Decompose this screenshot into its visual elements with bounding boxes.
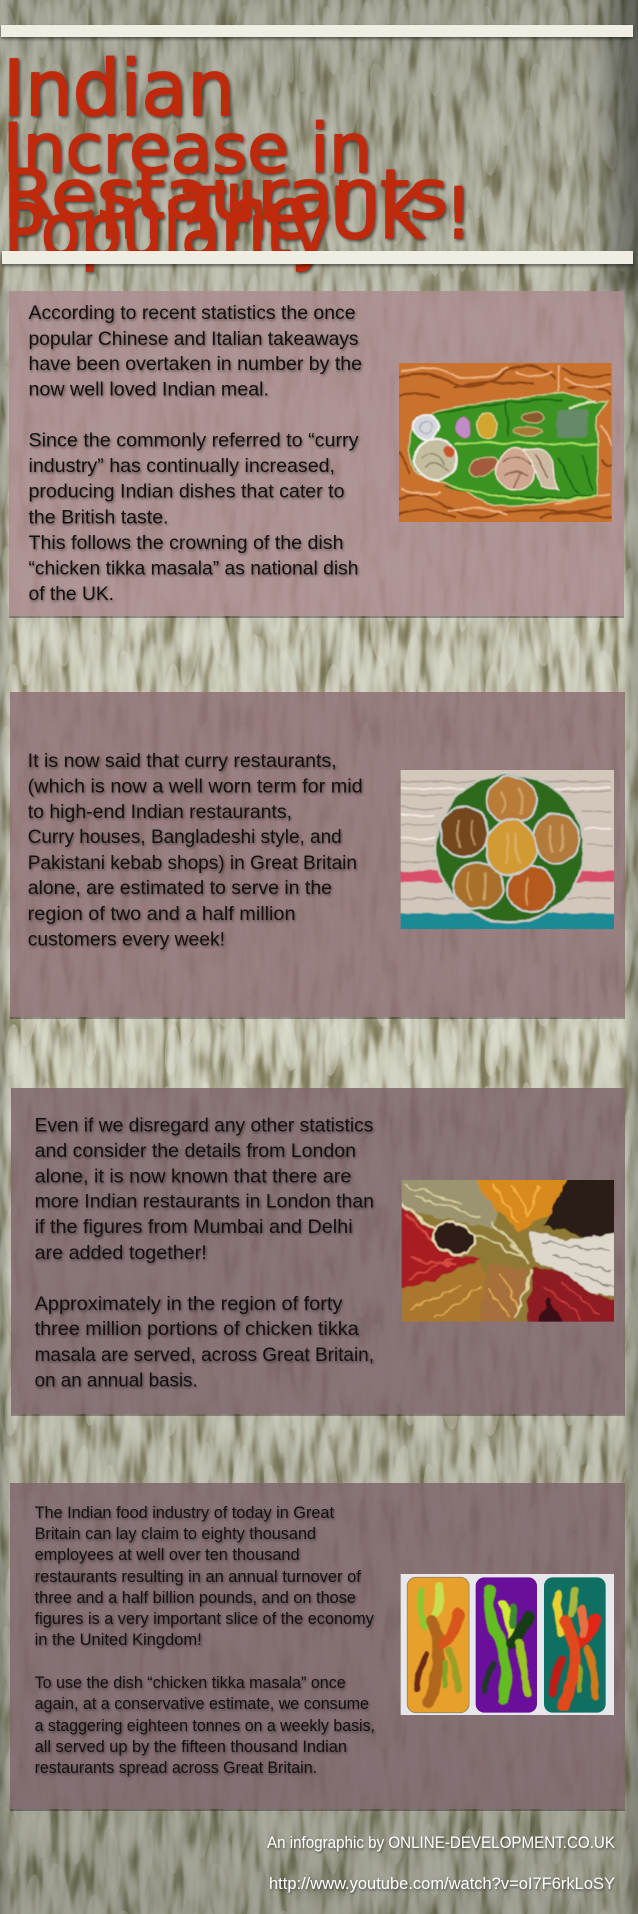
text: recent statistics: “chicken tikka masala” as national dish bbox=[28, 558, 358, 580]
image: three chilli panels bbox=[400, 1574, 614, 1715]
panel: London statistics bbox=[11, 1088, 625, 1416]
text: recent statistics: This follows the crowning of the dish bbox=[28, 532, 344, 554]
text: industry figures: a staggering eighteen tonnes on a weekly basis, bbox=[35, 1717, 375, 1735]
text: London statistics: three million portions of chicken tikka bbox=[35, 1318, 359, 1340]
panel: industry figures bbox=[10, 1483, 625, 1811]
text: London statistics: if the figures from Mumbai and Delhi bbox=[35, 1216, 353, 1238]
text: curry restaurants: region of two and a half million bbox=[28, 903, 295, 925]
text: curry restaurants: Pakistani kebab shops) in Great Britain bbox=[28, 852, 357, 874]
text: recent statistics: popular Chinese and Italian takeaways bbox=[28, 328, 359, 350]
text: industry figures: all served up by the fifteen thousand Indian bbox=[35, 1738, 347, 1756]
text: industry figures: restaurants spread across Great Britain. bbox=[35, 1759, 317, 1777]
text: curry restaurants: customers every week! bbox=[28, 928, 225, 950]
text: London statistics bbox=[35, 1114, 374, 1392]
text: London statistics: are added together! bbox=[35, 1242, 207, 1264]
text: industry figures: employees at well over ten thousand bbox=[35, 1546, 300, 1564]
text: curry restaurants: to high-end Indian restaurants, bbox=[28, 801, 292, 823]
text: industry figures: in the United Kingdom! bbox=[35, 1631, 202, 1649]
title: Indian Restaurants Increase in Popularity in the UK: Popularity bbox=[4, 189, 330, 274]
image: thali on banana leaf bbox=[399, 363, 612, 522]
text: recent statistics: the British taste. bbox=[28, 506, 168, 528]
text: industry figures: Britain can lay claim to eighty thousand bbox=[35, 1525, 316, 1543]
text: recent statistics bbox=[28, 302, 362, 605]
text: curry restaurants: Curry houses, Bangladeshi style, and bbox=[28, 826, 342, 848]
text: London statistics: Approximately in the region of forty bbox=[35, 1293, 343, 1315]
panel: recent statistics bbox=[9, 291, 624, 618]
title: Indian Restaurants Increase in Popularity in the UK: In The UK ! bbox=[100, 173, 472, 255]
text: curry restaurants: It is now said that curry restaurants, bbox=[28, 750, 337, 772]
text: recent statistics: producing Indian dishes that cater to bbox=[28, 480, 345, 502]
text: London statistics: more Indian restaurants in London than bbox=[35, 1190, 374, 1212]
text: London statistics: on an annual basis. bbox=[35, 1370, 198, 1392]
text: industry figures: To use the dish “chicken tikka masala” once bbox=[35, 1674, 346, 1692]
text: industry figures: The Indian food industry of today in Great bbox=[35, 1504, 334, 1522]
text: recent statistics: of the UK. bbox=[28, 583, 114, 605]
text: curry restaurants bbox=[28, 750, 363, 950]
text: industry figures: again, at a conservative estimate, we consume bbox=[35, 1695, 369, 1713]
panel: curry restaurants bbox=[10, 692, 625, 1019]
text: London statistics: alone, it is now known that there are bbox=[35, 1166, 351, 1188]
text: industry figures: three and a half billion pounds, and on those bbox=[35, 1589, 356, 1607]
title: Indian Restaurants Increase in Popularity in the UK: Increase in bbox=[3, 110, 372, 189]
text: recent statistics: now well loved Indian meal. bbox=[28, 378, 269, 400]
image: tray of curry bowls bbox=[400, 770, 614, 929]
title: Indian Restaurants Increase in Popularity in the UK: Restaurants bbox=[3, 156, 448, 235]
text: industry figures: restaurants resulting in an annual turnover of bbox=[35, 1568, 361, 1586]
text: recent statistics: have been overtaken in number by the bbox=[28, 353, 362, 375]
text: curry restaurants: alone, are estimated to serve in the bbox=[28, 877, 332, 899]
text: London statistics: masala are served, across Great Britain, bbox=[35, 1344, 374, 1366]
bottom banner bar bbox=[2, 251, 633, 264]
footer: video link: http://www.youtube.com/watch?v=oI7F6rkLoSY bbox=[269, 1874, 615, 1893]
title: Indian Restaurants Increase in Popularity in the UK bbox=[3, 45, 472, 274]
text: recent statistics: Since the commonly referred to “curry bbox=[28, 430, 359, 452]
text: industry figures: figures is a very important slice of the economy bbox=[35, 1610, 375, 1628]
text: recent statistics: industry” has continually increased, bbox=[28, 455, 335, 477]
image: spices and spoon bbox=[402, 1180, 614, 1322]
text: curry restaurants: (which is now a well worn term for mid bbox=[28, 776, 363, 798]
text: recent statistics: According to recent statistics the once bbox=[28, 302, 356, 324]
text: industry figures bbox=[35, 1504, 375, 1777]
title: Indian Restaurants Increase in Popularity in the UK: Indian bbox=[3, 45, 235, 134]
text: London statistics: Even if we disregard any other statistics bbox=[35, 1114, 374, 1136]
top banner bar bbox=[1, 25, 633, 37]
text: London statistics: and consider the details from London bbox=[35, 1140, 356, 1162]
